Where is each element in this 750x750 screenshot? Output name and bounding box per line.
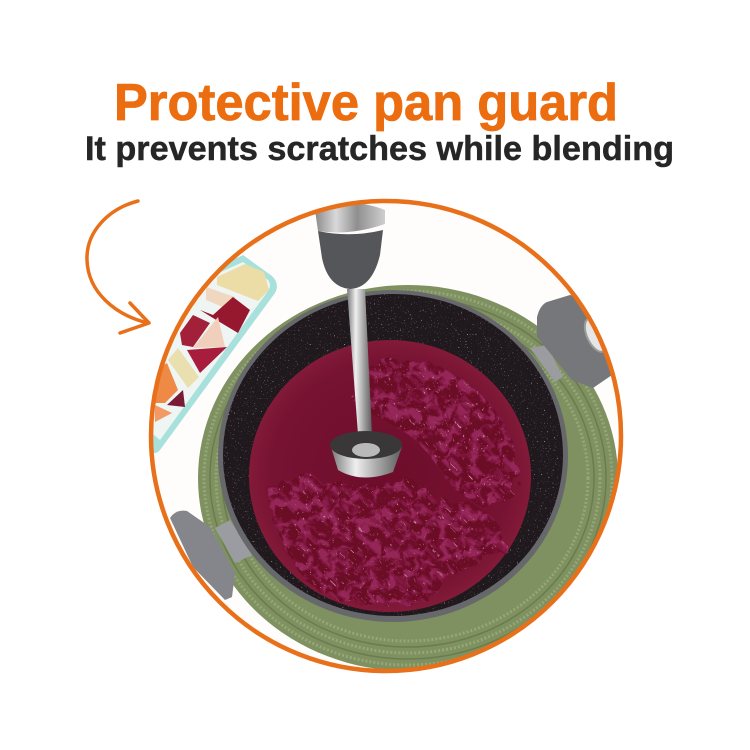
vegetable pieces [217,264,269,301]
title: Protective pan guard [114,74,618,132]
subtitle: It prevents scratches while blending [85,130,674,168]
handle right [530,295,612,388]
arrow [87,201,149,333]
pot [218,290,568,622]
handle left [170,511,252,600]
blended puree [267,358,521,607]
orange circle outline [151,201,621,671]
hand blender [315,203,402,478]
green placemat [198,285,618,671]
photo circle [153,204,618,669]
food tray [148,255,277,453]
